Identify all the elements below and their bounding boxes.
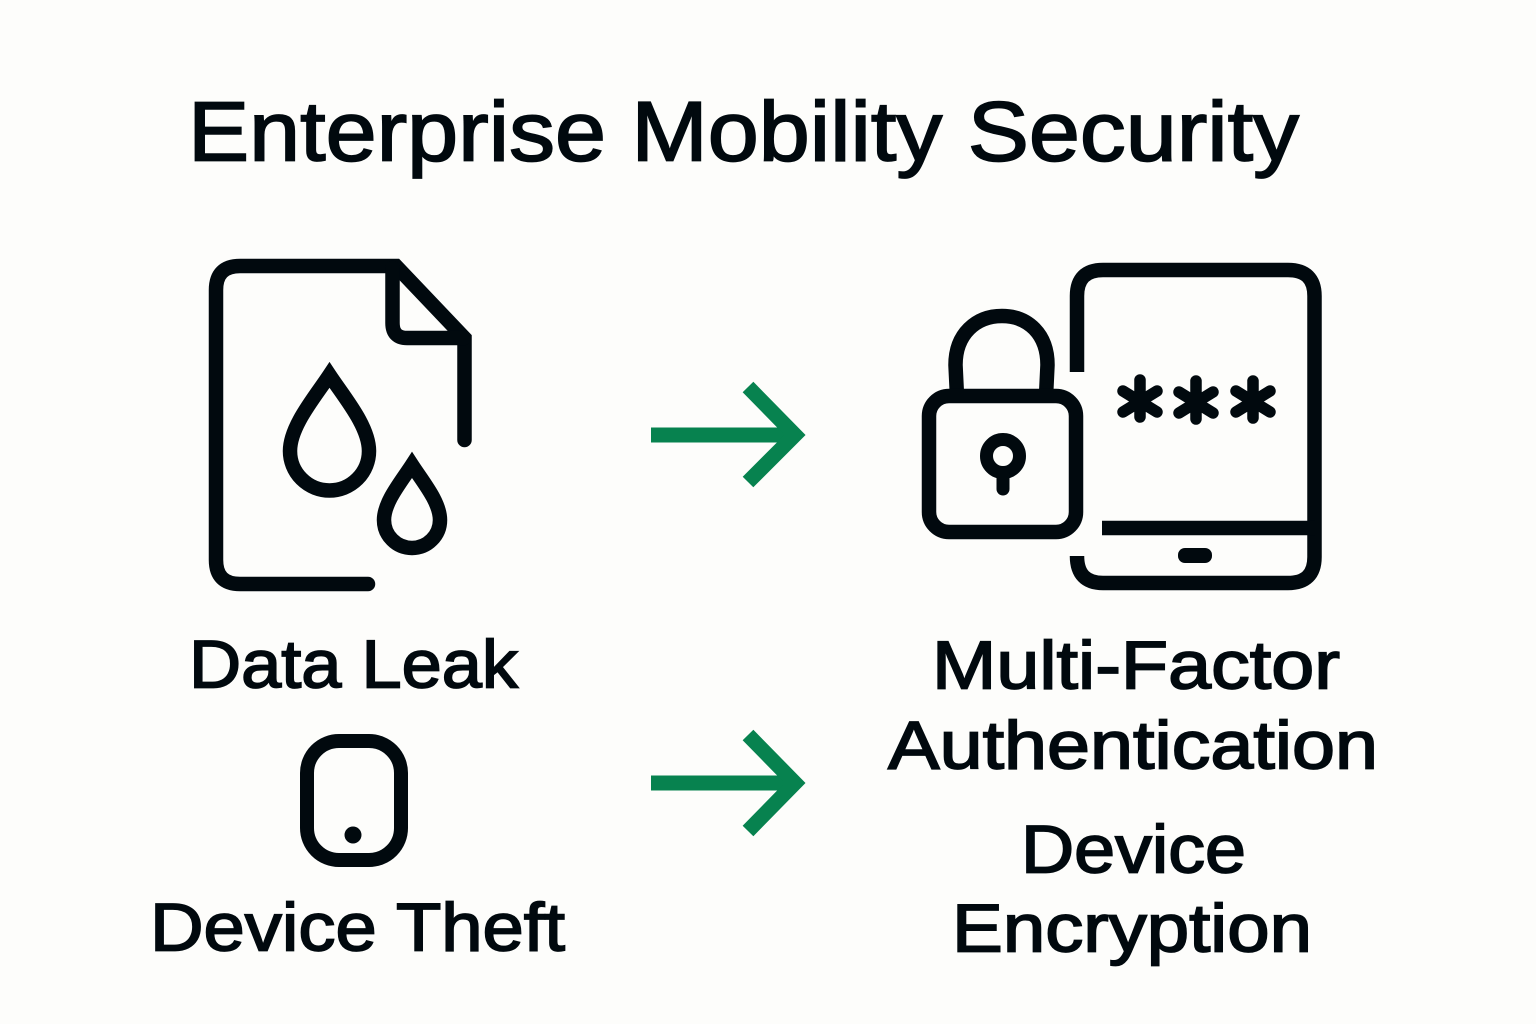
label: device encryption xyxy=(952,812,1312,966)
icon: lock and tablet with password xyxy=(929,270,1315,583)
label: device encryption: Device xyxy=(1021,812,1246,888)
tablet home button xyxy=(1178,548,1212,563)
padlock xyxy=(929,316,1076,532)
arrow: data leak to multi-factor authentication xyxy=(651,387,795,482)
label: data leak: Data Leak xyxy=(189,626,519,702)
label: multi-factor authentication: Authentication xyxy=(888,708,1378,784)
title: Enterprise Mobility Security xyxy=(188,84,1299,178)
tablet outline xyxy=(1077,270,1315,583)
password asterisks xyxy=(1123,380,1270,419)
label: multi-factor authentication: Multi-Factor xyxy=(932,628,1340,704)
label: multi-factor authentication xyxy=(888,628,1378,784)
icon: data leak document xyxy=(216,266,464,584)
label: device encryption: Encryption xyxy=(952,890,1312,966)
arrow: device theft to device encryption xyxy=(651,735,795,831)
icon: stolen device xyxy=(307,741,401,860)
label: device theft: Device Theft xyxy=(150,890,565,966)
